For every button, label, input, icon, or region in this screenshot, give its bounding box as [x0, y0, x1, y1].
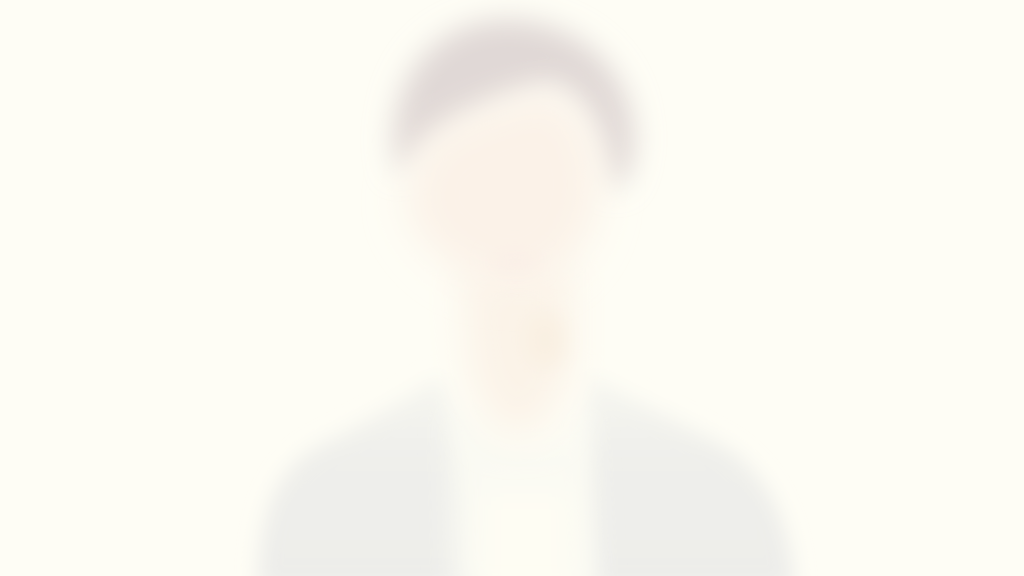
- facial shading: [491, 254, 565, 368]
- shirt: [450, 400, 595, 576]
- jacket: [258, 375, 795, 576]
- face: [405, 92, 598, 285]
- neck: [462, 270, 572, 435]
- hair: [394, 20, 634, 190]
